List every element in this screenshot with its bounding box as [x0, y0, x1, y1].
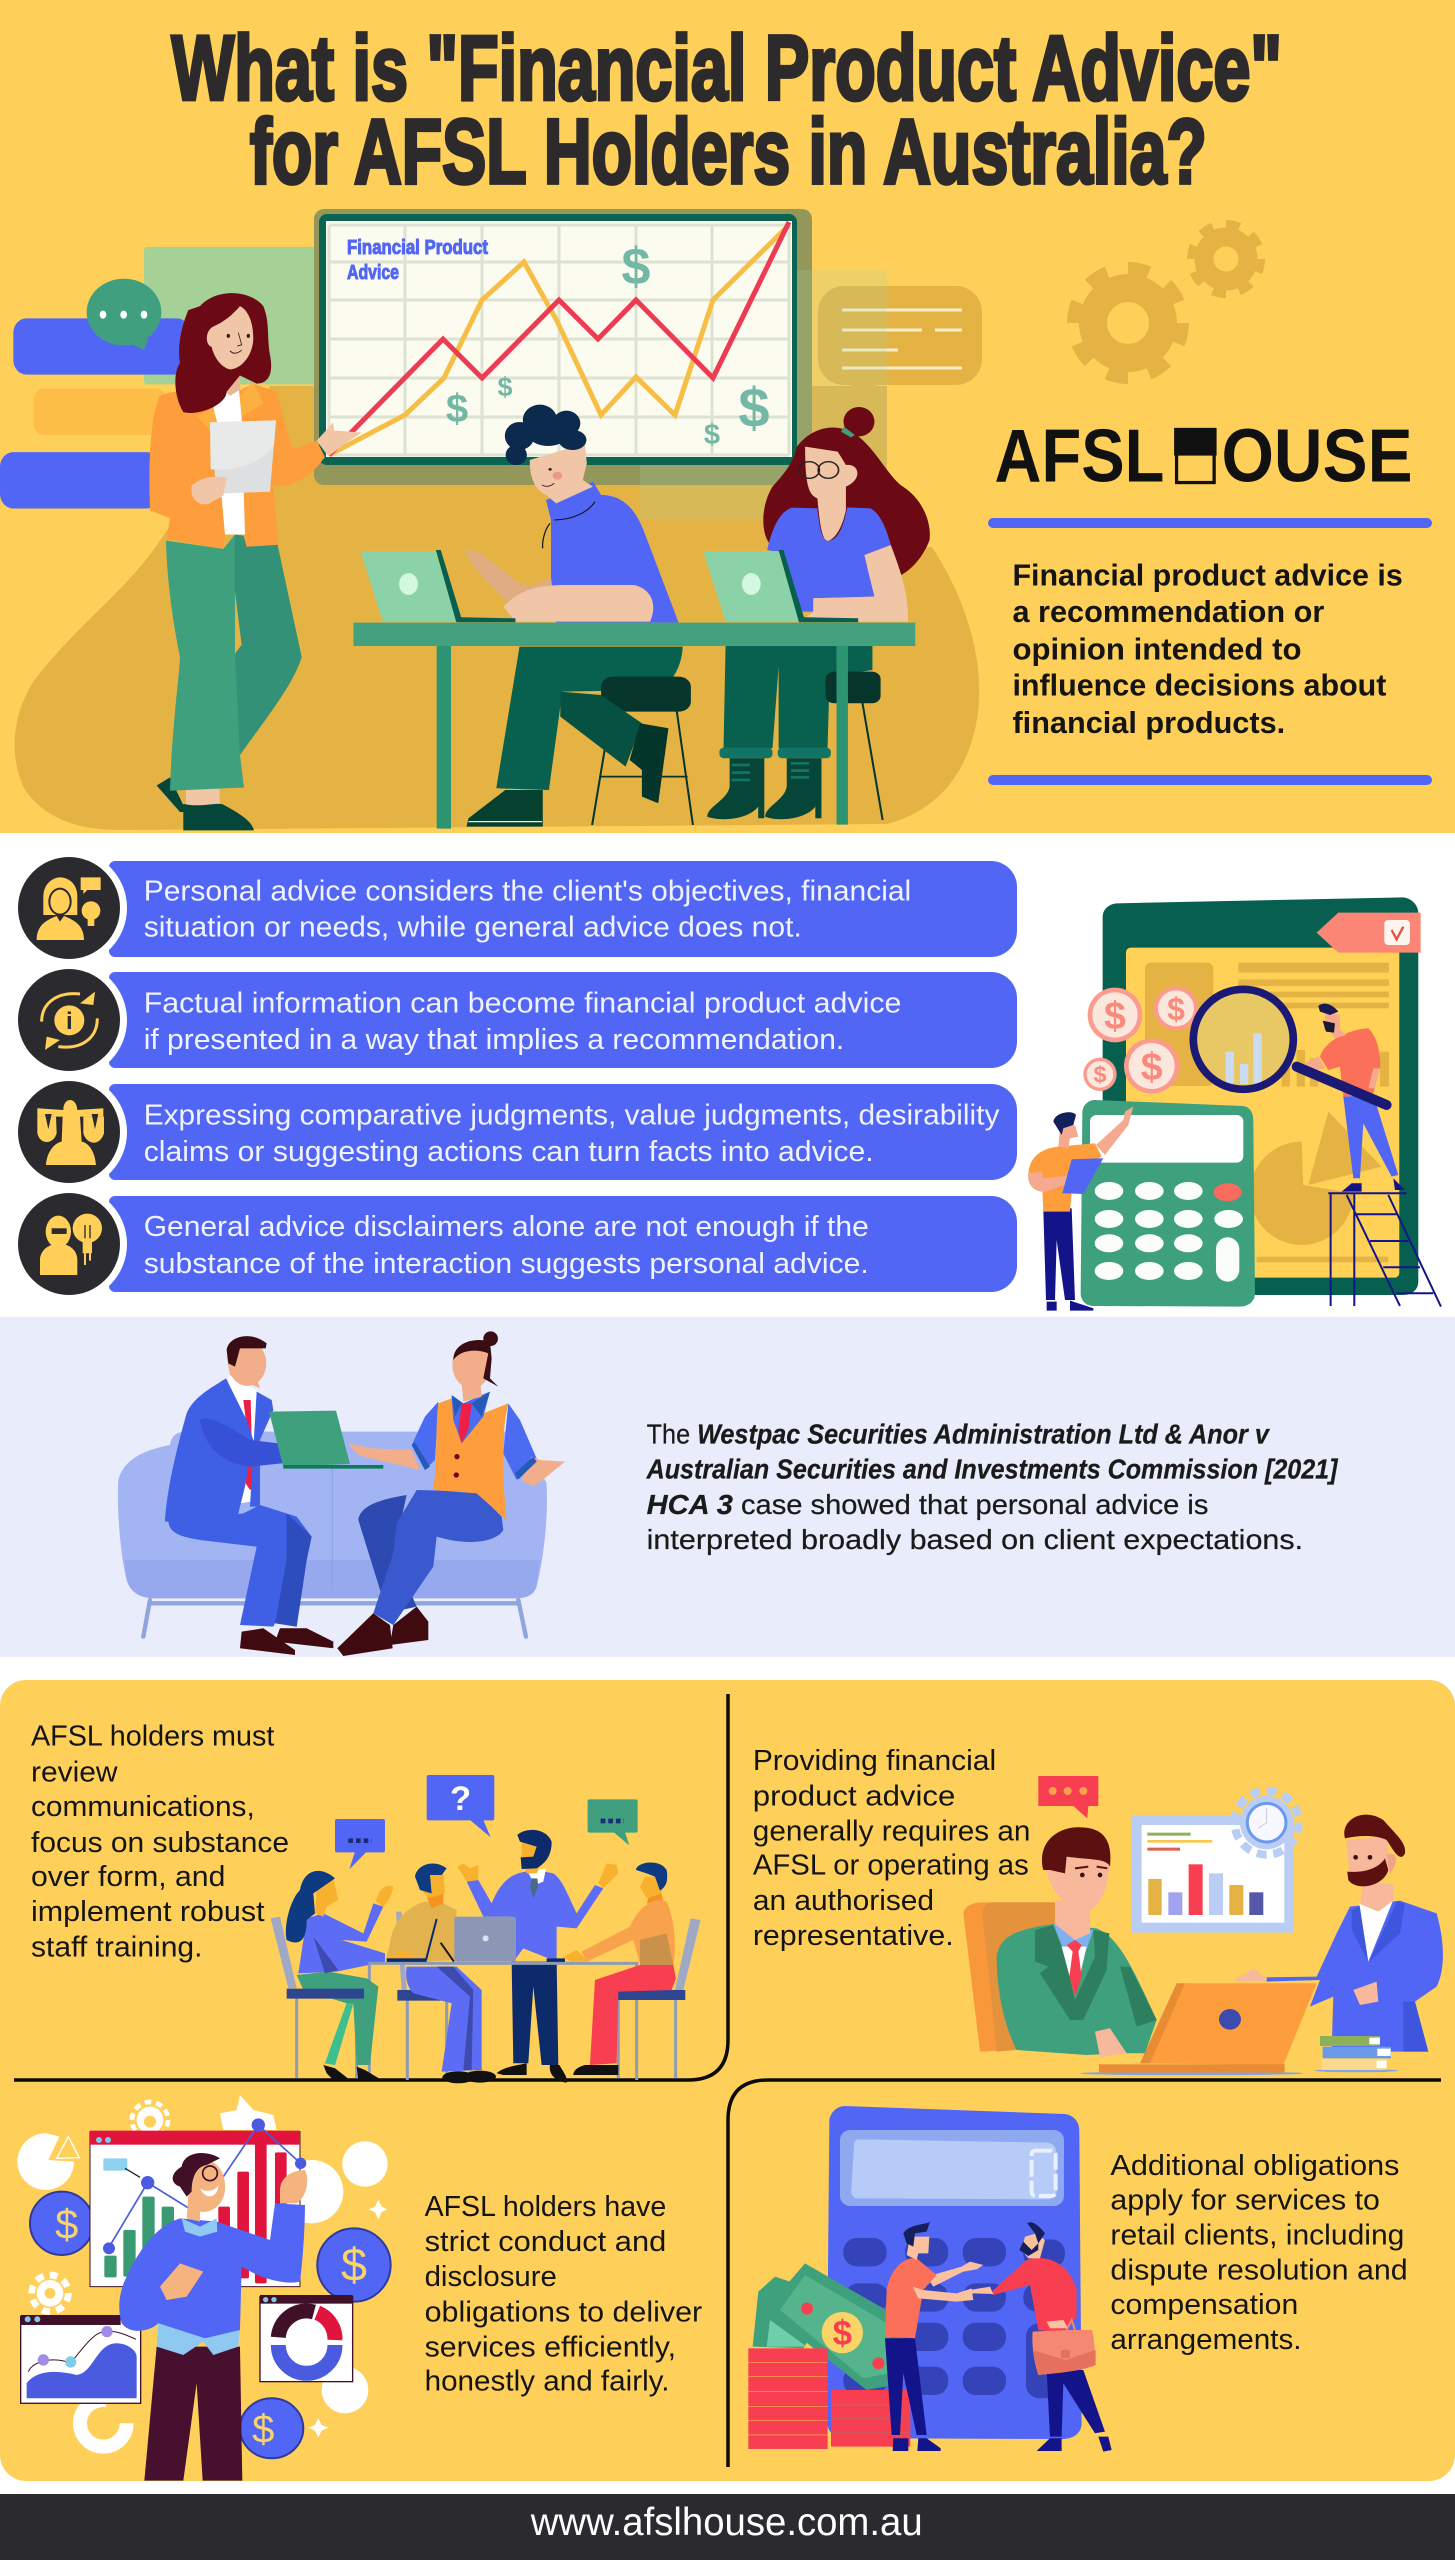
illustration: advisor and client with chart [963, 1776, 1443, 2075]
text: Westpac case: Australian Securities and Investments Commission [2021] [646, 1454, 1338, 1485]
text: Westpac case: HCA 3 case showed that personal advice is [647, 1489, 1208, 1520]
text: review communications: AFSL holders must [31, 1721, 274, 1753]
icon: person with idea [40, 1214, 102, 1275]
illustration: tablet, coins, magnifier and calculator [1028, 897, 1441, 1311]
icon: information cycle [42, 992, 97, 1050]
footer bar [0, 2494, 1455, 2560]
text: conduct obligations: strict conduct and [425, 2226, 666, 2258]
panel: obligations background [0, 1680, 1455, 2481]
text: Westpac case: The Westpac Securities Administration Ltd & Anor v [647, 1419, 1270, 1450]
text: AFSL requirement: AFSL or operating as [753, 1850, 1029, 1882]
logo: AFSL House [994, 414, 1413, 498]
logo: AFSL House: OUSE [1221, 414, 1413, 498]
chart: financial product advice board: $ [738, 376, 770, 439]
illustration: analyst with dashboards: $ [252, 2408, 274, 2452]
chart: financial product advice board: $ [622, 238, 651, 296]
text: retail client obligations: compensation [1110, 2289, 1298, 2321]
logo: AFSL House: AFSL [994, 414, 1164, 498]
text: review communications: staff training. [31, 1931, 202, 1963]
panel: advice row 4 [11, 1186, 1017, 1302]
panel: white advice band [0, 833, 1455, 1317]
panel: advice row 3 [11, 1074, 1017, 1190]
text: conduct obligations [425, 2191, 703, 2398]
chart: financial product advice board: $ [446, 387, 468, 431]
panel: advice row 1: Personal advice considers the client's objectives, financial [144, 876, 911, 908]
chart: financial product advice board: $ [497, 372, 513, 402]
panel: advice row 4: substance of the interaction suggests personal advice. [144, 1248, 869, 1280]
text: conduct obligations: services efficiently, [425, 2331, 676, 2363]
text: retail client obligations [1110, 2150, 1408, 2356]
panel: advice row 2: Factual information can become financial product advice [144, 987, 901, 1019]
text: retail client obligations: retail clients, including [1110, 2220, 1404, 2252]
text: definition of financial product advice: financial products. [1012, 707, 1285, 740]
text: conduct obligations: obligations to deliver [425, 2296, 703, 2328]
chart: financial product advice board: $ [704, 419, 720, 451]
illustration: two men on sofa [118, 1331, 565, 1656]
text: retail client obligations: dispute resolution and [1110, 2255, 1408, 2287]
text: retail client obligations: arrangements. [1110, 2324, 1302, 2356]
title [171, 18, 1282, 203]
text: AFSL requirement: representative. [753, 1920, 954, 1952]
panel: advice row 4: General advice disclaimers alone are not enough if the [144, 1211, 869, 1243]
text: review communications [31, 1721, 289, 1963]
illustration: analyst with dashboards: $ [341, 2239, 367, 2291]
icon: small gear [1193, 226, 1259, 292]
text: review communications: implement robust [31, 1896, 265, 1928]
illustration: tablet, coins, magnifier and calculator: $ [1167, 991, 1185, 1027]
text: definition of financial product advice: influence decisions about [1012, 670, 1386, 703]
panel: advice row 3: Expressing comparative judgments, value judgments, desirability [144, 1099, 1000, 1131]
illustration: tablet, coins, magnifier and calculator: $ [1104, 994, 1126, 1038]
text: Westpac case [646, 1419, 1338, 1555]
icon: large gear [1076, 271, 1180, 375]
dividers: obligation quadrants [14, 1694, 1441, 2467]
illustration: background blob [15, 386, 979, 830]
chart: financial product advice board: Financial Product [347, 237, 488, 259]
text: AFSL requirement: product advice [753, 1780, 955, 1812]
icon: information cycle: i [66, 1008, 73, 1035]
illustration: header back shapes [0, 247, 320, 508]
divider: upper lede rule [988, 518, 1432, 528]
text: conduct obligations: disclosure [425, 2261, 557, 2293]
text: retail client obligations: Additional obligations [1110, 2150, 1399, 2182]
text: AFSL requirement: an authorised [753, 1885, 934, 1917]
text: retail client obligations: apply for services to [1110, 2184, 1380, 2216]
illustration: desk with man and woman at laptops [353, 405, 930, 829]
text: Westpac case: interpreted broadly based on client expectations. [647, 1524, 1303, 1555]
illustration: calculator, cash and handshake [748, 2106, 1112, 2452]
panel: advice row 1: situation or needs, while general advice does not. [144, 912, 802, 944]
divider: lower lede rule [988, 775, 1432, 785]
panel: header background [0, 0, 1455, 833]
panel: advice row 2: if presented in a way that implies a recommendation. [144, 1024, 844, 1056]
text: AFSL requirement: generally requires an [753, 1815, 1030, 1847]
text: AFSL requirement [753, 1745, 1030, 1952]
text: review communications: review [31, 1757, 118, 1789]
illustration: analyst with dashboards [17, 2095, 391, 2481]
icon: yellow speech bubble [818, 286, 982, 397]
illustration: team meeting [271, 1775, 701, 2083]
panel: advice row 2 [11, 962, 1017, 1078]
illustration: tablet, coins, magnifier and calculator: $ [1141, 1045, 1163, 1089]
panel: case band [0, 1317, 1455, 1657]
illustration: team meeting: ? [450, 1780, 471, 1818]
chart: financial product advice board [314, 209, 887, 520]
text: review communications: over form, and [31, 1861, 225, 1893]
icon: green chat bubble [87, 279, 161, 350]
text: definition of financial product advice [1012, 559, 1403, 740]
text: review communications: communications, [31, 1791, 255, 1823]
text: definition of financial product advice: a recommendation or [1012, 596, 1325, 629]
text: definition of financial product advice: Financial product advice is [1012, 559, 1403, 592]
icon: scales of judgment [37, 1100, 104, 1165]
text: conduct obligations: honestly and fairly. [425, 2366, 670, 2398]
text: review communications: focus on substance [31, 1827, 289, 1859]
illustration: tablet, coins, magnifier and calculator: $ [1093, 1062, 1106, 1088]
text: conduct obligations: AFSL holders have [425, 2191, 666, 2223]
illustration: calculator, cash and handshake: $ [833, 2314, 852, 2353]
illustration: analyst with dashboards: $ [55, 2200, 78, 2247]
text: definition of financial product advice: opinion intended to [1012, 634, 1302, 667]
panel: advice row 1 [11, 850, 1017, 966]
panel: advice row 3: claims or suggesting actions can turn facts into advice. [144, 1136, 874, 1168]
footer: website address: www.afslhouse.com.au [530, 2501, 923, 2544]
text: AFSL requirement: Providing financial [753, 1745, 996, 1777]
icon: adviser with lightbulb [37, 877, 101, 940]
illustration: woman presenting [149, 293, 362, 830]
chart: financial product advice board: Advice [347, 262, 399, 284]
